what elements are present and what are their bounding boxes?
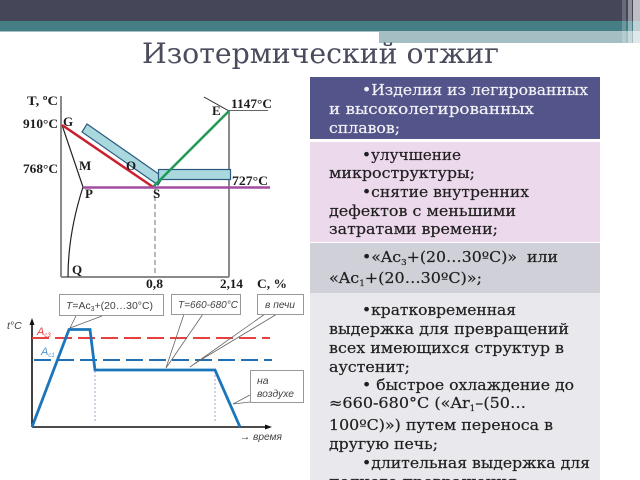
critical lines: [32, 338, 272, 360]
diagram labels: T, ºC: [27, 93, 58, 108]
chart labels: [7, 320, 282, 443]
line PSK: [83, 186, 270, 189]
panel: temperature: 3: [401, 258, 407, 267]
isothermal annealing chart: [7, 294, 304, 443]
panel: process steps: 1: [470, 404, 475, 413]
heat zone: hypoeutectoid: [82, 124, 163, 185]
callout: in air: [250, 370, 304, 402]
callout: Ac3 temperature: 3: [91, 306, 95, 313]
chart labels: A: [37, 326, 44, 338]
panel: process steps: 100ºC)») путем переноса в: [329, 418, 553, 434]
callout: in air: воздухе: [257, 388, 294, 400]
panel: process steps: другую печь;: [329, 437, 438, 453]
diagram labels: 1147°C: [231, 96, 272, 111]
callout: 660-680 temperature: T=660-680°C: [178, 299, 238, 311]
panel: temperature: «Ac: [329, 271, 356, 287]
chart labels: → время: [240, 431, 282, 443]
diagram labels: M: [79, 158, 91, 173]
diagram labels: 727°C: [232, 173, 268, 188]
chart labels: c3: [44, 333, 51, 339]
callout: Ac3 temperature: T=Ac: [66, 300, 91, 312]
callout: Ac3 temperature: [60, 294, 164, 316]
panel: process steps: всех имеющихся структур в: [329, 341, 564, 357]
panel: process steps: [310, 293, 600, 480]
callout: in furnace: [258, 294, 304, 314]
line GS: [62, 125, 153, 187]
diagram labels: G: [63, 114, 73, 129]
header band: [0, 0, 640, 43]
temperature curve: [32, 330, 240, 427]
panel: process steps: аустенит;: [329, 360, 410, 376]
diagram labels: 2,14: [220, 276, 244, 291]
diagram labels: O: [126, 158, 136, 173]
panel: process steps: • быстрое охлаждение до: [362, 378, 574, 394]
title: Изотермический отжиг: [142, 37, 499, 70]
diagram labels: 0,8: [146, 276, 164, 291]
panel: process steps: выдержка для превращений: [329, 322, 569, 338]
panel: materials: •Изделия из легированных: [362, 83, 588, 99]
panel: purpose: затратами времени;: [329, 222, 498, 238]
panel: process steps: ≈660-680°C («Ar: [329, 396, 456, 412]
chart labels: c1: [48, 353, 55, 359]
diagram labels: [23, 93, 287, 291]
diagram labels: S: [153, 186, 160, 201]
diagram labels: P: [85, 186, 93, 201]
panel: purpose: дефектов с меньшими: [329, 204, 516, 220]
heat zone: hypereutectoid: [158, 170, 230, 180]
chart labels: t°C: [7, 320, 22, 332]
diagram labels: 910°C: [23, 116, 58, 131]
panel: temperature: +(20…30ºC)»;: [365, 271, 482, 287]
diagram labels: E: [212, 103, 221, 118]
panel: process steps: •кратковременная: [362, 303, 516, 319]
panel: purpose: •снятие внутренних: [362, 185, 529, 201]
panel: materials: [310, 77, 600, 139]
panel: temperature: [310, 243, 600, 293]
diagram labels: 768°C: [23, 161, 58, 176]
chart axes: [30, 318, 272, 430]
diagram labels: C, %: [257, 276, 287, 291]
callout: Ac3 temperature: +(20…30°C): [95, 300, 153, 312]
panel: purpose: микроструктуры;: [329, 166, 475, 182]
panel: temperature: +(20…30ºC)» или: [407, 250, 558, 266]
chart labels: A: [41, 346, 48, 358]
panel: temperature: •«Ac: [362, 250, 398, 266]
panel: materials: и высоколегированных: [329, 102, 534, 118]
line SE: [153, 111, 229, 187]
diagram labels: Q: [72, 262, 82, 277]
panel: temperature: 1: [359, 279, 365, 288]
callout: 660-680 temperature: [172, 294, 240, 314]
callout: in air: на: [257, 375, 269, 387]
panel: process steps: –(50…: [475, 396, 526, 412]
panel: purpose: [310, 142, 600, 242]
panel: purpose: •улучшение: [362, 148, 461, 164]
phase diagram: [23, 93, 287, 291]
leader lines: [70, 314, 277, 404]
callout: in furnace: в печи: [265, 299, 295, 311]
panel: materials: сплавов;: [329, 121, 400, 137]
panel: process steps: •длительная выдержка для: [362, 456, 590, 472]
